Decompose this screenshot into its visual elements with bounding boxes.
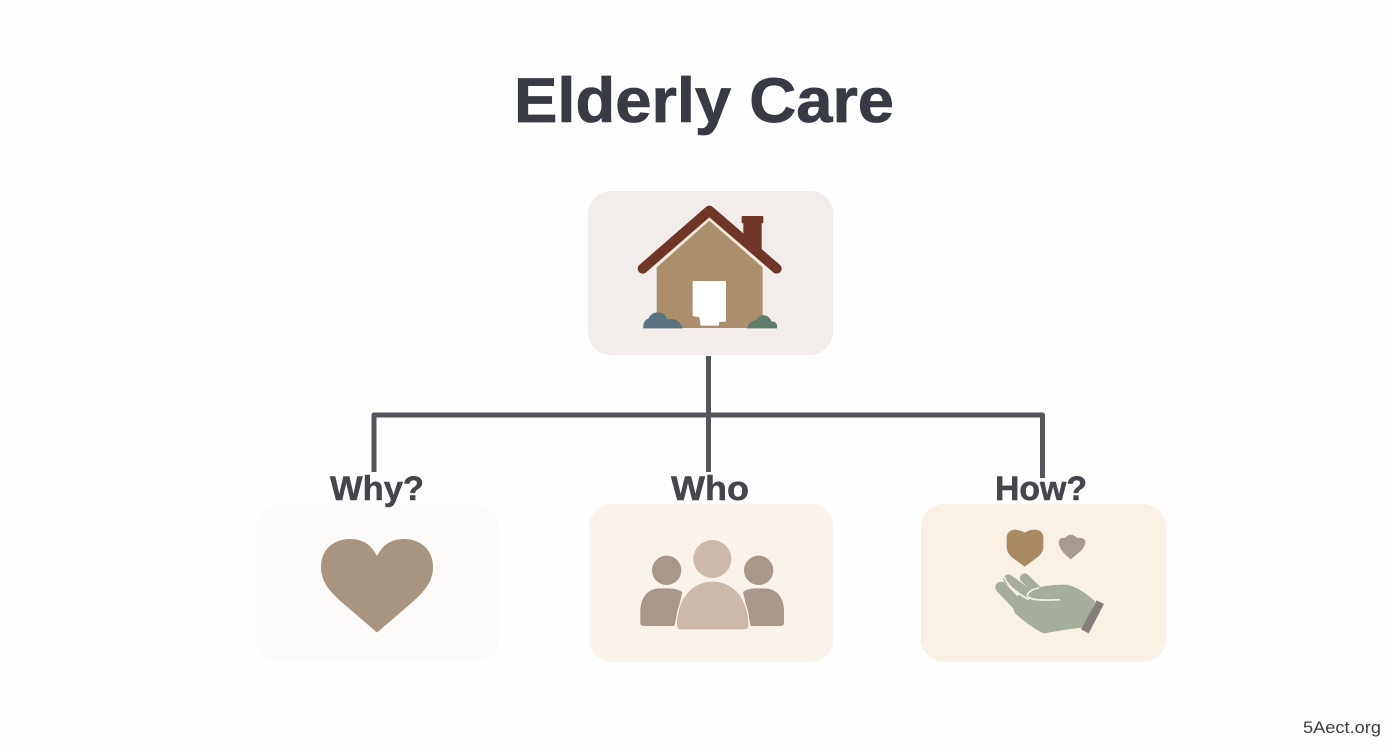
panel background: why xyxy=(256,504,499,662)
watermark: 5Aect.org xyxy=(1303,718,1381,737)
title: Elderly Care xyxy=(514,66,894,136)
icon: cuff xyxy=(1081,600,1104,633)
panel background: how xyxy=(921,504,1166,662)
connector lines xyxy=(374,356,1042,478)
panel: home xyxy=(588,191,833,355)
icon: large heart xyxy=(1007,530,1043,567)
panel: who xyxy=(589,504,834,662)
icon: heart xyxy=(321,539,433,632)
panel: how xyxy=(921,504,1166,662)
panel: why xyxy=(256,504,499,662)
label: Who: Who xyxy=(671,470,749,508)
icon: small heart xyxy=(1059,535,1085,559)
label: How?: How? xyxy=(995,470,1087,508)
icon: hand xyxy=(1001,577,1095,633)
panel background: home xyxy=(588,191,833,355)
icon: group of people xyxy=(640,540,784,629)
panel background: who xyxy=(589,504,834,662)
icon: house xyxy=(643,211,777,328)
icon: caring hand with hearts xyxy=(1001,530,1104,633)
label: Why?: Why? xyxy=(330,470,424,508)
